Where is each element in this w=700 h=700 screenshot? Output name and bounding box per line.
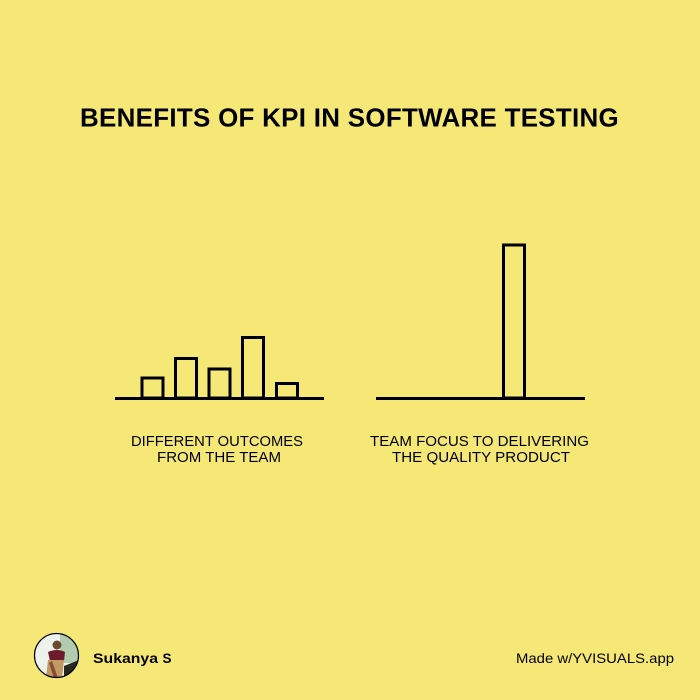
bar 3 (209, 369, 230, 398)
tall bar (504, 245, 524, 398)
baseline (115, 397, 324, 400)
chart: different outcomes (115, 338, 324, 398)
bar 4 (242, 338, 264, 398)
caption: different outcomes (131, 434, 303, 466)
bar 2 (176, 358, 196, 398)
bar 1 (142, 378, 163, 398)
caption: different outcomes: FROM THE TEAM (157, 450, 281, 466)
caption: team focus: THE QUALITY PRODUCT (392, 450, 570, 466)
title: BENEFITS OF KPI IN SOFTWARE TESTING (80, 102, 619, 132)
author name: S (162, 651, 172, 666)
credit: Made w/YVISUALS.app (516, 650, 674, 666)
avatar (34, 633, 79, 678)
baseline (376, 397, 585, 400)
chart: team focus (376, 245, 585, 398)
caption: different outcomes: DIFFERENT OUTCOMES (131, 434, 303, 450)
author name: Sukanya (93, 651, 159, 666)
caption: team focus: TEAM FOCUS TO DELIVERING (370, 434, 589, 450)
caption: team focus (370, 434, 589, 466)
bar 5 (276, 384, 298, 398)
